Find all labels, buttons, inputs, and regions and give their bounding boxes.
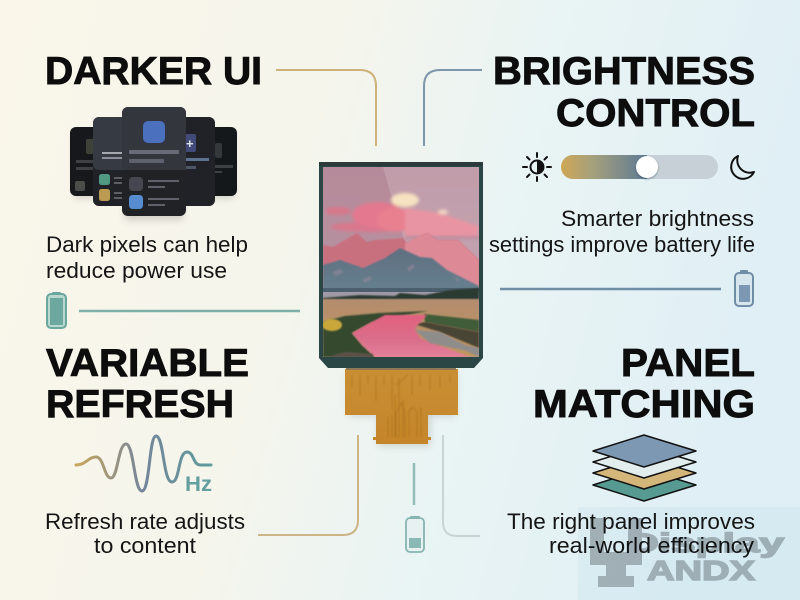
- heading: panel matching: PANEL: [621, 342, 755, 385]
- icon: stacked dark UI screens: +: [186, 136, 194, 151]
- icon: sun: [523, 153, 551, 181]
- watermark text: ANDX: [647, 555, 755, 586]
- heading: variable refresh: VARIABLE: [46, 342, 249, 385]
- icon: panel layers: [593, 435, 696, 501]
- heading: panel matching: [533, 342, 755, 426]
- screen glare: [383, 167, 479, 262]
- connector: display to lower battery: [413, 463, 415, 505]
- panel: brightness control: [424, 50, 755, 306]
- connector: display to battery: [500, 288, 721, 290]
- text: brightness description: [489, 206, 755, 257]
- icon: stacked dark UI screens: [70, 107, 237, 220]
- text: darker UI description: Dark pixels can help: [46, 232, 248, 257]
- watermark text: Display: [627, 528, 784, 558]
- watermark: display logo: [578, 507, 800, 600]
- watermark text: [627, 528, 784, 586]
- chart: refresh waveform: [76, 436, 211, 491]
- text: refresh description: Refresh rate adjusts: [45, 509, 245, 534]
- text: refresh description: [45, 509, 245, 558]
- gravel bank: [415, 330, 479, 357]
- panel: variable refresh: [45, 342, 358, 558]
- mountains: [323, 233, 479, 284]
- text: refresh description: to content: [94, 533, 196, 558]
- heading: panel matching: MATCHING: [533, 383, 755, 426]
- heading: variable refresh: [46, 342, 249, 426]
- wildflowers: [322, 319, 342, 331]
- connector: refresh to display: [258, 435, 358, 535]
- text: brightness description: settings improve battery life: [489, 232, 755, 257]
- display screen image: mountain landscape: [322, 167, 479, 357]
- heading: variable refresh: REFRESH: [46, 383, 234, 426]
- watermark monitor logo: [590, 518, 642, 587]
- fields: [323, 299, 479, 357]
- clouds: [325, 193, 479, 239]
- panel: darker UI: [45, 50, 376, 328]
- display bezel: [319, 162, 483, 368]
- heading: brightness control: BRIGHTNESS: [493, 50, 755, 93]
- icon: moon: [731, 156, 754, 179]
- river: [352, 315, 470, 357]
- connector: display to panel matching: [443, 435, 480, 536]
- text: panel matching description: The right panel improves: [507, 509, 755, 534]
- connector: battery to display: [79, 310, 300, 312]
- text: darker UI description: reduce power use: [46, 258, 227, 283]
- brightness slider: [561, 155, 718, 180]
- heading: brightness control: [493, 50, 755, 135]
- label: Hz: Hz: [185, 473, 212, 496]
- connector: brightness to display: [424, 70, 482, 146]
- marsh banks: [323, 311, 428, 357]
- icon: low battery: [406, 516, 424, 552]
- connector: darker UI to display: [276, 70, 376, 146]
- text: panel matching description: real-world efficiency: [549, 533, 754, 558]
- heading: brightness control: CONTROL: [556, 92, 755, 135]
- text: brightness description: Smarter brightness: [561, 206, 754, 231]
- lake and tree line: [323, 288, 479, 292]
- panel: panel matching: [443, 342, 755, 558]
- icon: full battery: [47, 292, 66, 328]
- flexible printed circuit: [345, 368, 458, 446]
- text: panel matching description: [507, 509, 755, 558]
- panel: central display module: [319, 162, 483, 446]
- heading: darker UI: DARKER UI: [45, 50, 262, 93]
- text: darker UI description: [46, 232, 248, 283]
- icon: half battery: [735, 270, 753, 306]
